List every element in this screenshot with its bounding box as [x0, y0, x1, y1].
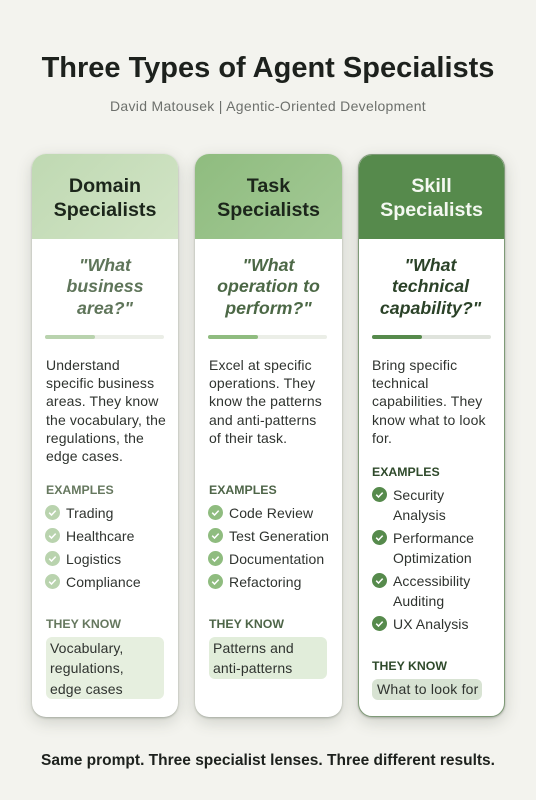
domain header: Specialists [54, 199, 156, 221]
example: ux analysis [372, 616, 469, 632]
panel: domain specialists: Compliance [66, 574, 141, 590]
task description [209, 356, 322, 446]
domain description: areas. They know [46, 393, 158, 409]
domain question [66, 254, 144, 318]
skill description: technical [372, 375, 429, 391]
subtitle: David Matousek | Agentic-Oriented Development [110, 98, 426, 114]
task header: Task [247, 174, 290, 196]
panel: domain specialists [32, 154, 178, 717]
task question [217, 254, 320, 318]
panel: task specialists: Documentation [229, 551, 324, 567]
example: documentation [208, 551, 324, 567]
footer statement: Same prompt. Three specialist lenses. Three different results. [41, 752, 495, 769]
domain description [46, 356, 166, 464]
domain description: the vocabulary, the [46, 412, 166, 428]
domain description: Understand [46, 356, 120, 372]
skill question [380, 254, 482, 318]
example: refactoring [208, 574, 301, 590]
task progress bar [208, 335, 327, 339]
panel: task specialists [195, 154, 342, 717]
panel: domain specialists: Logistics [66, 551, 121, 567]
task header [195, 154, 342, 239]
example: test generation [208, 528, 329, 544]
task description: and anti-patterns [209, 412, 316, 428]
example: accessibility auditing [372, 573, 470, 609]
example: code review [208, 505, 314, 521]
task description: operations. They [209, 375, 315, 391]
domain header [32, 154, 178, 239]
panel: skill specialists: Analysis [393, 507, 446, 523]
skill progress bar [372, 335, 491, 339]
example: compliance [45, 574, 141, 590]
skill question: capability?" [380, 298, 481, 318]
task they know box: Patterns and [213, 640, 294, 656]
skill header: Specialists [380, 199, 483, 221]
skill header [358, 154, 505, 239]
panel: task specialists: Test Generation [229, 528, 329, 544]
skill description: for. [372, 430, 392, 446]
panel: domain specialists: Healthcare [66, 528, 135, 544]
task question: perform?" [225, 298, 312, 318]
domain they know box: Vocabulary, [50, 640, 123, 656]
skill header: Skill [411, 174, 452, 196]
panel: skill specialists: UX Analysis [393, 616, 469, 632]
skill they know label: THEY KNOW [372, 658, 447, 672]
skill description [372, 356, 486, 446]
panel: skill specialists: Security [393, 487, 444, 503]
task they know label: THEY KNOW [209, 616, 284, 630]
task they know box: anti-patterns [213, 660, 292, 676]
panel: skill specialists [358, 154, 505, 717]
domain they know box: edge cases [50, 680, 123, 696]
domain progress bar [45, 335, 164, 339]
domain description: specific business [46, 375, 154, 391]
skill they know box: What to look for [377, 681, 479, 697]
domain description: regulations, the [46, 430, 144, 446]
task question: "What [243, 254, 294, 274]
domain question: business [66, 276, 144, 296]
panel: skill specialists: Accessibility [393, 573, 470, 589]
domain examples label: EXAMPLES [46, 483, 114, 497]
panel: domain specialists: Trading [66, 505, 114, 521]
task question: operation to [217, 276, 320, 296]
panel: skill specialists: Performance [393, 530, 474, 546]
task description: Excel at specific [209, 356, 312, 372]
example: performance optimization [372, 530, 474, 566]
domain they know box [46, 637, 164, 699]
skill description: capabilities. They [372, 393, 482, 409]
skill question: technical [392, 276, 469, 296]
domain question: "What [79, 254, 131, 274]
panel: task specialists: Code Review [229, 505, 313, 521]
task description: of their task. [209, 430, 287, 446]
task header: Specialists [217, 199, 320, 221]
panel: skill specialists: Optimization [393, 550, 472, 566]
skill description: know what to look [372, 412, 486, 428]
domain description: edge cases. [46, 448, 123, 464]
skill description: Bring specific [372, 356, 457, 372]
task description: know the patterns [209, 393, 322, 409]
title: Three Types of Agent Specialists [42, 52, 494, 84]
example: healthcare [45, 528, 135, 544]
domain they know label: THEY KNOW [46, 616, 121, 630]
example: trading [45, 505, 114, 521]
example: security analysis [372, 487, 446, 523]
domain question: area?" [77, 298, 133, 318]
skill examples label: EXAMPLES [372, 465, 440, 479]
panel: task specialists: Refactoring [229, 574, 301, 590]
example: logistics [45, 551, 121, 567]
skill question: "What [405, 254, 456, 274]
task examples label: EXAMPLES [209, 483, 277, 497]
domain header: Domain [69, 174, 141, 196]
domain they know box: regulations, [50, 660, 124, 676]
task they know box [209, 637, 327, 679]
panel: skill specialists: Auditing [393, 593, 444, 609]
